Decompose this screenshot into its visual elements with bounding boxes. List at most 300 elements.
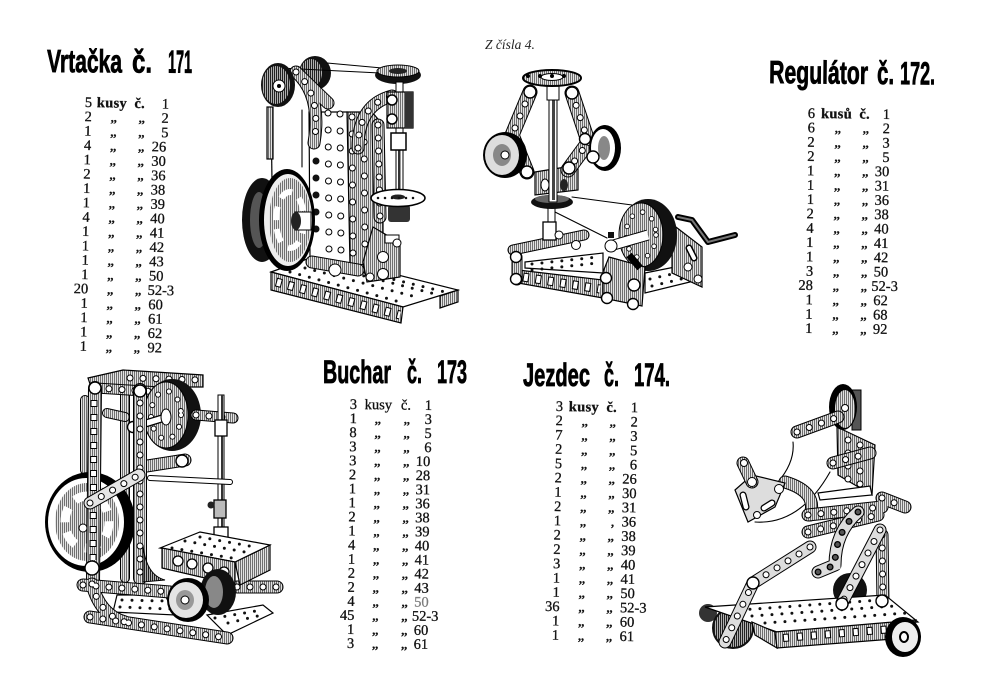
parts list: Jezdec 174: 26 xyxy=(622,472,637,488)
parts list: Vrtačka 171: ,, xyxy=(106,340,112,354)
parts list: Jezdec 174: ,, xyxy=(578,615,584,629)
parts list: Buchar 173: 3 xyxy=(349,439,357,455)
parts list: Jezdec 174: 61 xyxy=(619,629,634,645)
parts list: Regulátor 172: ,, xyxy=(833,308,839,322)
parts list: Buchar 173: ,, xyxy=(404,427,410,441)
parts list: Vrtačka 171: 1 xyxy=(80,310,88,326)
parts list: Regulátor 172: 62 xyxy=(873,293,888,309)
parts list: Buchar 173: ,, xyxy=(373,567,379,581)
parts list: Buchar 173: ,, xyxy=(403,497,409,511)
parts list: Buchar 173: ,, xyxy=(373,595,379,609)
parts list: Jezdec 174: 5 xyxy=(630,443,637,459)
parts list: Buchar 173: 5 xyxy=(424,426,432,442)
parts list: Buchar 173: ,, xyxy=(373,539,379,553)
parts list: Jezdec 174: ,, xyxy=(609,458,615,472)
parts list: Regulátor 172: ,, xyxy=(834,179,840,193)
base plate xyxy=(271,258,458,323)
parts list: Vrtačka 171: ,, xyxy=(136,255,142,269)
parts list: Buchar 173: ,, xyxy=(401,609,408,624)
parts list: Jezdec 174: ,, xyxy=(582,415,588,429)
parts list: Jezdec 174: ,, xyxy=(580,515,586,529)
parts list: Jezdec 174: ,, xyxy=(606,601,613,615)
parts list: Vrtačka 171: ,, xyxy=(109,197,115,211)
parts list: Jezdec 174: ,, xyxy=(579,586,585,600)
parts list: Regulátor 172: 2 xyxy=(807,135,815,151)
parts list: Buchar 173: 1 xyxy=(350,411,357,427)
parts list: Regulátor 172: 28 xyxy=(798,278,813,294)
parts list: Buchar 173: ,, xyxy=(372,637,378,651)
parts list: Vrtačka 171: 1 xyxy=(83,181,90,197)
parts list: Regulátor 172: ,, xyxy=(835,136,841,150)
parts list: Buchar 173: 4 xyxy=(348,538,356,554)
parts list: Vrtačka 171: 1 xyxy=(80,339,87,355)
parts list: Jezdec 174: ,, xyxy=(578,629,584,643)
parts list: Buchar 173: ,, xyxy=(372,623,378,637)
parts list: Vrtačka 171: ,, xyxy=(107,297,113,311)
parts list: Vrtačka 171: ,, xyxy=(106,326,112,340)
parts list: Buchar 173: 2 xyxy=(349,467,356,483)
illustration: power hammer model 173 xyxy=(45,370,277,638)
parts list: Vrtačka 171: 1 xyxy=(82,238,89,254)
illustration: governor model 172 xyxy=(483,70,735,310)
rider arms xyxy=(797,417,870,463)
corner bracket xyxy=(143,545,165,582)
parts list: Vrtačka 171: ,, xyxy=(109,211,115,225)
parts list: Jezdec 174: 1 xyxy=(552,628,559,644)
parts list: Vrtačka 171: ,, xyxy=(137,197,143,211)
parts list: Vrtačka 171: ,, xyxy=(110,125,117,139)
parts list: Vrtačka 171: 60 xyxy=(148,297,163,313)
parts list: Buchar 173: ,, xyxy=(374,454,380,468)
parts list: Vrtačka 171: ,, xyxy=(109,182,115,197)
heading: Buchar č. 173: č. xyxy=(407,354,422,390)
parts list: Jezdec 174: ,, xyxy=(579,558,585,572)
parts list: Jezdec 174: ,, xyxy=(581,458,587,472)
top disc xyxy=(523,70,581,86)
parts list: Buchar 173: 45 xyxy=(340,608,355,624)
parts list: Regulátor 172: 6 xyxy=(808,106,815,122)
parts list: Regulátor 172: 31 xyxy=(875,178,889,195)
parts list: Buchar 173: 31 xyxy=(415,482,430,498)
crank bracket xyxy=(672,224,702,287)
parts list: Regulátor 172: 92 xyxy=(873,322,888,338)
parts list: Regulátor 172: ,, xyxy=(835,122,841,136)
parts list: Vrtačka 171: 1 xyxy=(81,267,89,283)
rear wheel of cart xyxy=(699,573,867,622)
parts list: Vrtačka 171: ,, xyxy=(134,327,140,341)
parts list: Buchar 173: ,, xyxy=(402,539,408,553)
parts list: Vrtačka 171: 38 xyxy=(151,182,165,199)
parts list: Vrtačka 171: 2 xyxy=(161,111,169,127)
governor arms xyxy=(510,86,590,178)
parts list: Buchar 173: ,, xyxy=(403,511,409,525)
parts list: Buchar 173: 10 xyxy=(416,454,430,470)
parts list: Vrtačka 171: ,, xyxy=(137,212,143,226)
spindle table disc xyxy=(371,190,425,222)
parts list: Vrtačka 171: 50 xyxy=(149,268,164,285)
parts list: Buchar 173: 2 xyxy=(348,509,356,525)
parts list: Buchar 173: ,, xyxy=(403,469,409,483)
parts list: Buchar 173: ,, xyxy=(402,581,408,595)
parts list: Vrtačka 171: ,, xyxy=(111,111,117,125)
parts list: Regulátor 172: ,, xyxy=(862,151,869,165)
parts list: Jezdec 174: ,, xyxy=(608,530,614,544)
parts list: Vrtačka 171: ,, xyxy=(135,298,141,312)
crank handle xyxy=(678,217,735,242)
parts list: Buchar 173: 1 xyxy=(349,481,356,497)
parts list: Regulátor 172: ,, xyxy=(833,251,839,265)
parts list: Vrtačka 171: ,, xyxy=(108,225,115,240)
parts list: Jezdec 174: 39 xyxy=(621,543,636,559)
parts list: Jezdec 174: 3 xyxy=(553,556,560,572)
parts list: Regulátor 172: ,, xyxy=(860,323,867,337)
parts list: Buchar 173: 43 xyxy=(414,581,429,597)
parts list: Jezdec 174: 2 xyxy=(555,442,562,458)
parts list: Jezdec 174: 2 xyxy=(554,499,561,515)
right cart wheel xyxy=(885,617,921,657)
parts list: Buchar 173: kusy xyxy=(365,397,393,413)
parts list: Jezdec 174: 2 xyxy=(553,542,561,558)
parts list: Vrtačka 171: ,, xyxy=(137,183,143,197)
lower strips xyxy=(83,561,277,638)
parts list: Buchar 173: 50 xyxy=(414,595,429,611)
parts list: Vrtačka 171: ,, xyxy=(138,126,145,140)
parts list: Buchar 173: ,, xyxy=(402,595,408,609)
parts list: Regulátor 172: 1 xyxy=(805,292,813,308)
parts list: Vrtačka 171 xyxy=(72,95,178,357)
parts list: Buchar 173: 1 xyxy=(348,523,356,539)
parts list: Vrtačka 171: 5 xyxy=(85,95,92,111)
base plates xyxy=(113,595,273,635)
parts list: Jezdec 174: 41 xyxy=(620,572,635,588)
heading: Buchar č. 173: 173 xyxy=(437,354,467,390)
parts list: Regulátor 172: 1 xyxy=(883,107,890,123)
parts list: Vrtačka 171: 42 xyxy=(149,240,164,256)
parts list: Buchar 173: ,, xyxy=(375,426,381,440)
parts list: Regulátor 172: 1 xyxy=(805,321,813,337)
parts list: Jezdec 174: ,, xyxy=(607,587,613,601)
parts list: Regulátor 172: č. xyxy=(859,107,870,123)
parts list: Jezdec 174: ,, xyxy=(606,615,612,629)
parts list: Regulátor 172: ,, xyxy=(834,208,840,222)
torso plate xyxy=(837,390,875,495)
parts list: Regulátor 172: ,, xyxy=(832,322,839,336)
parts list: Regulátor 172: ,, xyxy=(834,165,840,179)
parts list: Vrtačka 171: 62 xyxy=(148,326,162,342)
parts list: Jezdec 174: 36 xyxy=(621,514,636,531)
parts list: Jezdec 174: 2 xyxy=(553,528,561,544)
parts list: Vrtačka 171: 41 xyxy=(150,225,165,242)
small pulleys xyxy=(167,569,236,622)
parts list: Regulátor 172: 4 xyxy=(806,221,814,237)
parts list: Vrtačka 171: 39 xyxy=(150,197,165,213)
parts list: Regulátor 172: 36 xyxy=(874,193,889,209)
parts list: Buchar 173: ,, xyxy=(401,624,407,638)
parts list: Vrtačka 171: 26 xyxy=(152,139,166,156)
parts list: Jezdec 174: 1 xyxy=(554,485,562,501)
parts list: Jezdec 174: 2 xyxy=(554,470,562,486)
parts list: Regulátor 172: 1 xyxy=(806,249,813,265)
parts list: Vrtačka 171: ,, xyxy=(110,139,116,154)
parts list: Regulátor 172: 5 xyxy=(882,150,890,166)
parts list: Vrtačka 171: 1 xyxy=(80,296,88,312)
parts list: Vrtačka 171: ,, xyxy=(106,312,113,326)
parts list: Regulátor 172: 6 xyxy=(808,120,815,136)
parts list: Jezdec 174: ,, xyxy=(580,529,586,543)
parts list: Jezdec 174: kusy xyxy=(569,399,600,416)
rear pulley xyxy=(299,56,331,90)
base frame xyxy=(510,235,603,298)
parts list: Jezdec 174: ,, xyxy=(608,501,614,515)
parts list: Buchar 173: ,, xyxy=(372,609,379,623)
parts list: Jezdec 174: ,, xyxy=(581,443,587,457)
parts list: Regulátor 172: ,, xyxy=(861,265,867,279)
parts list: Buchar 173: ,, xyxy=(374,497,380,511)
back plate xyxy=(309,112,383,266)
parts list: Vrtačka 171: ,, xyxy=(109,168,116,182)
thin cross strip xyxy=(150,478,230,482)
parts list: Jezdec 174: ,, xyxy=(609,472,615,486)
parts list: Jezdec 174: ,, xyxy=(579,543,586,557)
parts list: Jezdec 174: ,, xyxy=(609,429,616,444)
heading: Regulátor č. 172.: Regulátor xyxy=(769,54,868,91)
weight left xyxy=(483,132,527,178)
parts list: Jezdec 174: ,, xyxy=(607,544,614,558)
parts list: Jezdec 174: ,, xyxy=(607,572,613,586)
front legs xyxy=(725,530,888,642)
parts list: Buchar 173: ,, xyxy=(374,469,380,483)
upper pulley xyxy=(143,379,201,451)
horse body strips xyxy=(808,498,905,532)
parts list: Regulátor 172: 52-3 xyxy=(871,279,898,295)
parts list: Buchar 173: č. xyxy=(401,398,411,414)
parts list: Buchar 173 xyxy=(340,397,441,653)
parts list: Vrtačka 171: ,, xyxy=(107,269,114,283)
parts list: Jezdec 174: 1 xyxy=(554,513,561,529)
parts list: Jezdec 174: 2 xyxy=(630,414,638,431)
parts list: Buchar 173: 4 xyxy=(347,594,355,610)
parts list: Jezdec 174: ,, xyxy=(581,429,588,443)
parts list: Regulátor 172: ,, xyxy=(861,251,867,265)
parts list: Buchar 173: 1 xyxy=(348,495,356,511)
parts list: Vrtačka 171: ,, xyxy=(136,226,143,240)
parts list: Buchar 173: ,, xyxy=(403,455,409,469)
governor shaft xyxy=(547,84,559,202)
parts list: Vrtačka 171: 20 xyxy=(74,281,88,297)
parts list: Jezdec 174: ,, xyxy=(580,500,586,515)
parts list: Regulátor 172: 1 xyxy=(805,307,813,323)
parts list: Regulátor 172: ,, xyxy=(862,208,868,222)
heading: Jezdec č. 174.: 174. xyxy=(634,357,670,393)
parts list: Regulátor 172: 50 xyxy=(874,264,888,281)
front arc xyxy=(818,512,858,572)
parts list: Vrtačka 171: 92 xyxy=(147,340,162,357)
parts list: Jezdec 174: 40 xyxy=(621,557,635,574)
parts list: Buchar 173: ,, xyxy=(374,483,380,497)
frame uprights xyxy=(89,382,146,582)
parts list: Jezdec 174: ,, xyxy=(579,572,585,586)
parts list: Jezdec 174: ,, xyxy=(608,487,615,501)
parts list: Jezdec 174: ,, xyxy=(580,486,587,500)
horse head xyxy=(735,460,812,522)
parts list: Buchar 173: 41 xyxy=(415,552,429,569)
parts list: Regulátor 172: 68 xyxy=(873,307,888,324)
heading: Regulátor č. 172.: č. xyxy=(877,55,894,91)
parts list: Regulátor 172: 2 xyxy=(807,149,815,165)
floor plate xyxy=(645,263,698,293)
parts list: Buchar 173: ,, xyxy=(373,581,379,595)
parts list: Vrtačka 171: ,, xyxy=(107,283,113,297)
parts list: Vrtačka 171: 1 xyxy=(80,324,87,341)
parts list: Regulátor 172: ,, xyxy=(833,294,839,308)
parts list: Vrtačka 171: 36 xyxy=(151,168,166,184)
parts list: Buchar 173: 3 xyxy=(347,636,354,652)
big flywheel xyxy=(45,472,135,572)
illustration: rider model 174 xyxy=(699,384,921,657)
heading: Jezdec č. 174.: Jezdec xyxy=(523,357,590,393)
cart base xyxy=(705,595,918,648)
parts list: Vrtačka 171: 4 xyxy=(82,210,91,226)
parts list: Buchar 173: 52-3 xyxy=(412,609,439,625)
parts list: Regulátor 172: 3 xyxy=(882,136,890,152)
parts list: Vrtačka 171: 2 xyxy=(83,167,91,183)
parts list: Jezdec 174: 3 xyxy=(556,399,563,415)
spindle xyxy=(387,82,413,194)
top spindle pulley xyxy=(375,65,421,84)
parts list: Regulátor 172: ,, xyxy=(861,294,867,308)
right bracket xyxy=(600,255,645,310)
parts list: Buchar 173: ,, xyxy=(373,525,380,539)
parts list: Regulátor 172: 1 xyxy=(807,178,814,194)
parts list: Jezdec 174: 1 xyxy=(552,585,560,601)
parts list: Regulátor 172: 2 xyxy=(806,206,814,222)
post xyxy=(543,208,563,240)
parts list: Jezdec 174: 50 xyxy=(620,586,635,602)
parts list: Jezdec 174: č. xyxy=(606,400,617,416)
parts list: Regulátor 172: ,, xyxy=(833,279,839,293)
arm to hammer rod xyxy=(196,415,233,418)
parts list: Regulátor 172: ,, xyxy=(862,179,868,193)
parts list: Regulátor 172: ,, xyxy=(861,280,867,294)
axle and knob xyxy=(605,232,648,252)
parts list: Vrtačka 171: 1 xyxy=(82,224,90,240)
parts list: Buchar 173: ,, xyxy=(403,483,409,497)
parts list: Vrtačka 171: ,, xyxy=(138,140,144,154)
parts list: Buchar 173: 6 xyxy=(424,440,432,456)
parts list: Vrtačka 171: ,, xyxy=(108,240,114,254)
heading: Regulátor č. 172.: 172. xyxy=(900,55,935,91)
parts list: Buchar 173: 28 xyxy=(416,468,430,484)
parts list: Buchar 173: ,, xyxy=(403,441,410,455)
parts list: Jezdec 174: 1 xyxy=(553,570,560,587)
parts list: Jezdec 174: 30 xyxy=(622,486,637,502)
parts list: Buchar 173: ,, xyxy=(402,525,409,539)
parts list: Buchar 173: 40 xyxy=(415,538,429,554)
parts list: Buchar 173: ,, xyxy=(402,553,408,567)
top pulley xyxy=(829,384,857,430)
parts list: Vrtačka 171: ,, xyxy=(134,312,141,326)
parts list: Buchar 173: ,, xyxy=(374,440,381,454)
diagonal link xyxy=(90,475,139,503)
parts list: Vrtačka 171: ,, xyxy=(137,169,144,183)
parts list: Buchar 173: 3 xyxy=(349,453,356,469)
heading: Jezdec č. 174.: č. xyxy=(604,357,619,393)
parts list: Regulátor 172: kusů xyxy=(821,106,852,122)
parts list: Vrtačka 171: 43 xyxy=(149,254,164,270)
saddle xyxy=(818,486,872,500)
scanned catalogue page: 171 xyxy=(168,44,192,80)
parts list: Buchar 173: 3 xyxy=(425,412,432,428)
back legs and rear strip xyxy=(882,535,883,602)
parts list: Regulátor 172: ,, xyxy=(862,165,868,179)
parts list: Regulátor 172: ,, xyxy=(861,308,867,322)
parts list: Buchar 173: 36 xyxy=(415,496,430,512)
heading: Buchar č. 173: Buchar xyxy=(323,354,391,390)
parts list: Vrtačka 171: 1 xyxy=(83,195,90,211)
weight right xyxy=(580,125,621,171)
parts list: Regulátor 172: 40 xyxy=(874,221,889,238)
parts list: Vrtačka 171: 1 xyxy=(81,253,89,269)
parts list: Vrtačka 171: 52-3 xyxy=(147,283,174,299)
curved strips xyxy=(296,72,392,217)
parts list: Jezdec 174: 60 xyxy=(620,615,634,631)
parts list: Vrtačka 171: kusy xyxy=(97,95,128,112)
upper axle xyxy=(128,409,171,432)
parts list: Regulátor 172: ,, xyxy=(863,122,869,136)
parts list: Vrtačka 171: č. xyxy=(134,96,145,112)
parts list: Jezdec 174: 31 xyxy=(622,500,636,516)
parts list: Regulátor 172: ,, xyxy=(862,194,868,208)
left top pulley xyxy=(261,63,295,107)
parts list: Regulátor 172: ,, xyxy=(834,193,840,207)
parts list: Vrtačka 171: ,, xyxy=(139,111,145,125)
parts list: Regulátor 172: 38 xyxy=(874,207,889,223)
tension spring xyxy=(267,107,273,182)
parts list: Buchar 173: 3 xyxy=(350,397,357,413)
reins xyxy=(755,442,830,522)
heading: Vrtačka č. 171: Vrtačka xyxy=(47,43,122,79)
parts list: Buchar 173: 2 xyxy=(348,566,355,582)
large pulley xyxy=(619,199,677,271)
parts list: Vrtačka 171: 4 xyxy=(84,138,92,154)
parts list: Regulátor 172: ,, xyxy=(834,222,840,236)
parts list: Jezdec 174: ,, xyxy=(609,444,615,458)
parts list: Buchar 173: 39 xyxy=(415,524,430,540)
parts list: Jezdec 174: 38 xyxy=(621,529,636,545)
parts list: Jezdec 174: ,, xyxy=(581,472,587,486)
parts list: Regulátor 172: 30 xyxy=(875,164,889,180)
bottom bracket with bolts xyxy=(312,227,401,282)
parts list: Vrtačka 171: ,, xyxy=(134,341,140,355)
parts list: Jezdec 174: 52-3 xyxy=(620,600,647,617)
parts list: Buchar 173: 1 xyxy=(347,622,354,638)
parts list: Buchar 173: 1 xyxy=(348,552,355,568)
governor collar xyxy=(531,165,578,209)
parts list: Regulátor 172: 2 xyxy=(883,121,890,137)
parts list: Regulátor 172: ,, xyxy=(833,236,840,250)
heading: Vrtačka č. 171: č. xyxy=(132,43,152,80)
parts list: Jezdec 174: 5 xyxy=(555,456,562,472)
belts xyxy=(545,197,632,238)
parts list: Jezdec 174: ,, xyxy=(606,630,612,644)
frame top xyxy=(88,370,203,392)
page reference: Z čísla 4.: Z čísla 4. xyxy=(485,37,535,52)
parts list: Regulátor 172: ,, xyxy=(861,237,868,251)
parts list: Buchar 173: ,, xyxy=(404,413,410,427)
drive belts xyxy=(280,63,382,167)
parts list: Buchar 173: ,, xyxy=(402,567,408,581)
parts list: Buchar 173: 61 xyxy=(414,637,428,653)
